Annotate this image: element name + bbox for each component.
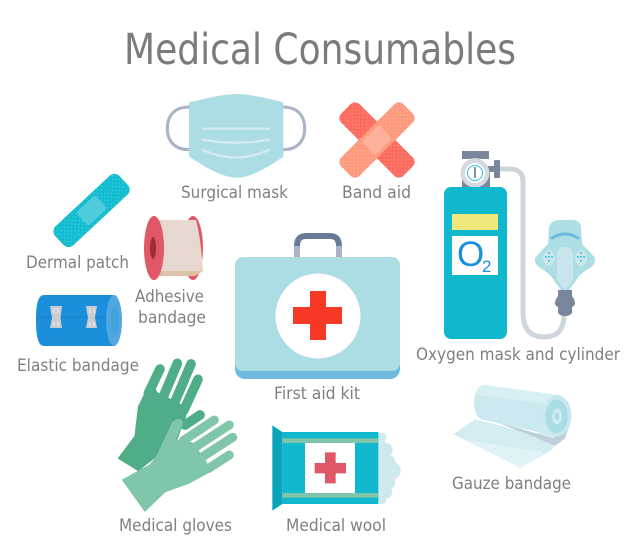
label: medical wool: Medical wool bbox=[286, 516, 386, 536]
item: adhesive bandage bbox=[135, 216, 206, 328]
item: first aid kit bbox=[235, 236, 400, 404]
icon: oxygen cylinder: O bbox=[457, 235, 484, 274]
item: oxygen mask and cylinder bbox=[416, 151, 620, 365]
item: dermal patch bbox=[26, 171, 133, 273]
label: first aid kit: First aid kit bbox=[274, 384, 360, 404]
icon: medical wool pack bbox=[272, 425, 401, 511]
icon: oxygen cylinder bbox=[444, 187, 507, 339]
icon: surgical mask bbox=[167, 94, 305, 178]
label: gauze bandage: Gauze bandage bbox=[452, 474, 571, 494]
label: band aid: Band aid bbox=[342, 183, 411, 203]
item: medical gloves bbox=[118, 363, 233, 536]
icon: elastic bandage roll bbox=[36, 295, 122, 346]
icon: adhesive bandage roll bbox=[144, 216, 203, 280]
label: dermal patch: Dermal patch bbox=[26, 253, 129, 273]
item: elastic bandage bbox=[17, 295, 139, 376]
item: gauze bandage bbox=[452, 385, 571, 494]
icon: first aid kit bbox=[235, 236, 400, 379]
title: Medical Consumables bbox=[124, 26, 516, 75]
item: medical wool bbox=[272, 425, 401, 536]
icon: oxygen cylinder: 2 bbox=[482, 257, 491, 276]
label: surgical mask: Surgical mask bbox=[181, 183, 288, 203]
item: surgical mask bbox=[167, 94, 305, 203]
icon: band aid bbox=[315, 78, 439, 202]
icon: medical gloves bbox=[118, 363, 233, 511]
label: medical gloves: Medical gloves bbox=[119, 516, 232, 536]
label: adhesive bandage: Adhesive bbox=[135, 287, 204, 307]
icon: oxygen tube bbox=[495, 169, 564, 337]
icon: dermal patch bbox=[50, 171, 133, 250]
label: adhesive bandage: bandage bbox=[138, 308, 206, 328]
label: oxygen mask and cylinder: Oxygen mask and cylinder bbox=[416, 345, 620, 365]
label: elastic bandage: Elastic bandage bbox=[17, 356, 139, 376]
icon: gauze bandage roll bbox=[453, 385, 571, 468]
item: band aid bbox=[315, 78, 439, 203]
icon: cylinder valve bbox=[460, 151, 500, 188]
icon: oxygen mask bbox=[535, 220, 595, 316]
